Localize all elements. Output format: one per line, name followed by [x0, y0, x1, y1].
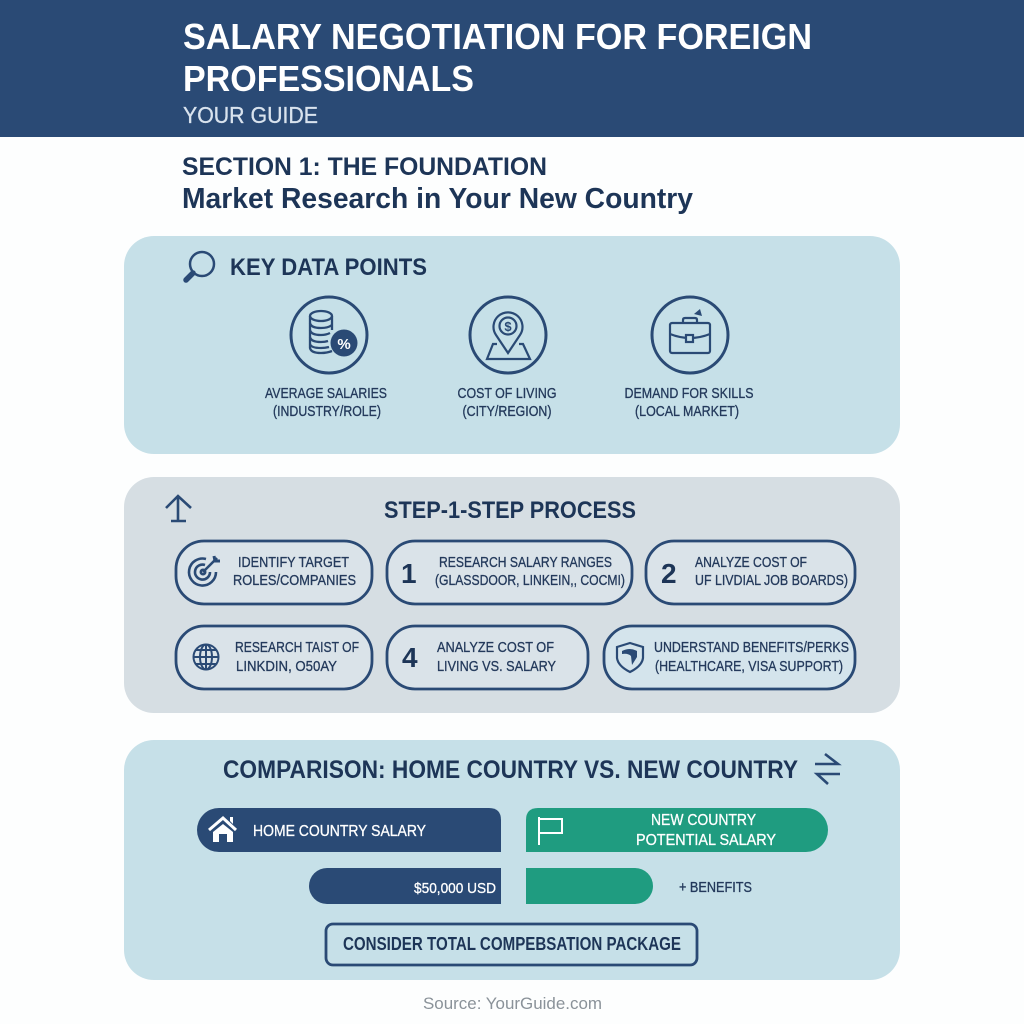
title: [183, 16, 812, 99]
heading: key data points: KEY DATA POINTS: [230, 254, 427, 281]
step: understand benefits: [604, 626, 855, 689]
icon: swap arrows: [815, 754, 840, 784]
icon: location pin on map: [470, 297, 546, 373]
step 2: analyze cost: ANALYZE COST OF: [695, 555, 807, 571]
title: SALARY NEGOTIATION FOR FOREIGN: [183, 16, 812, 57]
bar: 50,000 usd: [309, 868, 501, 904]
label: demand for skills: (LOCAL MARKET): [635, 404, 739, 420]
label: cost of living: COST OF LIVING: [458, 386, 556, 402]
heading: step process: STEP-1-STEP PROCESS: [384, 497, 636, 524]
icon: up arrow: [166, 496, 191, 521]
step 1: research salary ranges: RESEARCH SALARY RANGES: [439, 555, 612, 571]
step: research taist: [176, 626, 372, 689]
step 2: analyze cost: UF LIVDIAL JOB BOARDS): [695, 573, 848, 589]
panel: comparison: [124, 740, 900, 980]
step: identify target: ROLES/COMPANIES: [233, 573, 356, 589]
section heading: SECTION 1: THE FOUNDATION: [182, 153, 547, 181]
callout: total compensation: [326, 924, 697, 965]
heading: comparison: COMPARISON: HOME COUNTRY VS. NEW COUNTRY: [223, 756, 798, 784]
label: average salaries: AVERAGE SALARIES: [265, 386, 387, 402]
step: research taist: RESEARCH TAIST OF: [235, 640, 359, 656]
step: identify target: [176, 541, 372, 604]
step 1: research salary ranges: [387, 541, 632, 604]
bar: new country value: [526, 868, 653, 904]
panel: key data points: [124, 236, 900, 454]
icon: coins and percent: [291, 297, 367, 373]
icon: magnifying glass: [186, 252, 214, 280]
panel: step process: [124, 477, 900, 713]
title: PROFESSIONALS: [183, 58, 474, 99]
bar: new country potential salary: [526, 808, 828, 852]
bar: home country salary: [197, 808, 501, 852]
step: identify target: IDENTIFY TARGET: [238, 555, 349, 571]
icon: briefcase: [652, 297, 728, 373]
step 4: analyze cost of living: LIVING VS. SALARY: [437, 659, 556, 675]
step: understand benefits: (HEALTHCARE, VISA SUPPORT): [655, 659, 843, 675]
step 4: analyze cost of living: 4: [402, 642, 418, 673]
label: average salaries: (INDUSTRY/ROLE): [273, 404, 381, 420]
icon: coins and percent: %: [337, 336, 351, 353]
section heading: [182, 153, 693, 215]
label: cost of living: (CITY/REGION): [462, 404, 552, 420]
step 2: analyze cost: 2: [661, 558, 677, 589]
source note: Source: YourGuide.com: [423, 994, 602, 1013]
bar: new country potential salary: POTENTIAL SALARY: [636, 832, 776, 849]
step 1: research salary ranges: 1: [401, 558, 417, 589]
bar: new country potential salary: NEW COUNTRY: [651, 812, 756, 829]
bar: 50,000 usd: $50,000 USD: [414, 880, 496, 897]
step 4: analyze cost of living: ANALYZE COST OF: [437, 640, 554, 656]
step 1: research salary ranges: (GLASSDOOR, LINKEIN,, COCMI): [435, 573, 625, 589]
label: benefits: + BENEFITS: [679, 880, 752, 896]
label: demand for skills: DEMAND FOR SKILLS: [624, 386, 754, 402]
callout: total compensation: CONSIDER TOTAL COMPEBSATION PACKAGE: [343, 934, 681, 954]
step 2: analyze cost: [646, 541, 855, 604]
bar: home country salary: HOME COUNTRY SALARY: [253, 823, 426, 840]
step: understand benefits: UNDERSTAND BENEFITS/PERKS: [654, 640, 849, 656]
step: research taist: LINKDIN, O50AY: [236, 659, 337, 675]
step 4: analyze cost of living: [387, 626, 588, 689]
section heading: Market Research in Your New Country: [182, 183, 693, 215]
subtitle: YOUR GUIDE: [183, 102, 318, 128]
icon: location pin on map: $: [504, 319, 512, 334]
header banner: [0, 0, 1024, 137]
